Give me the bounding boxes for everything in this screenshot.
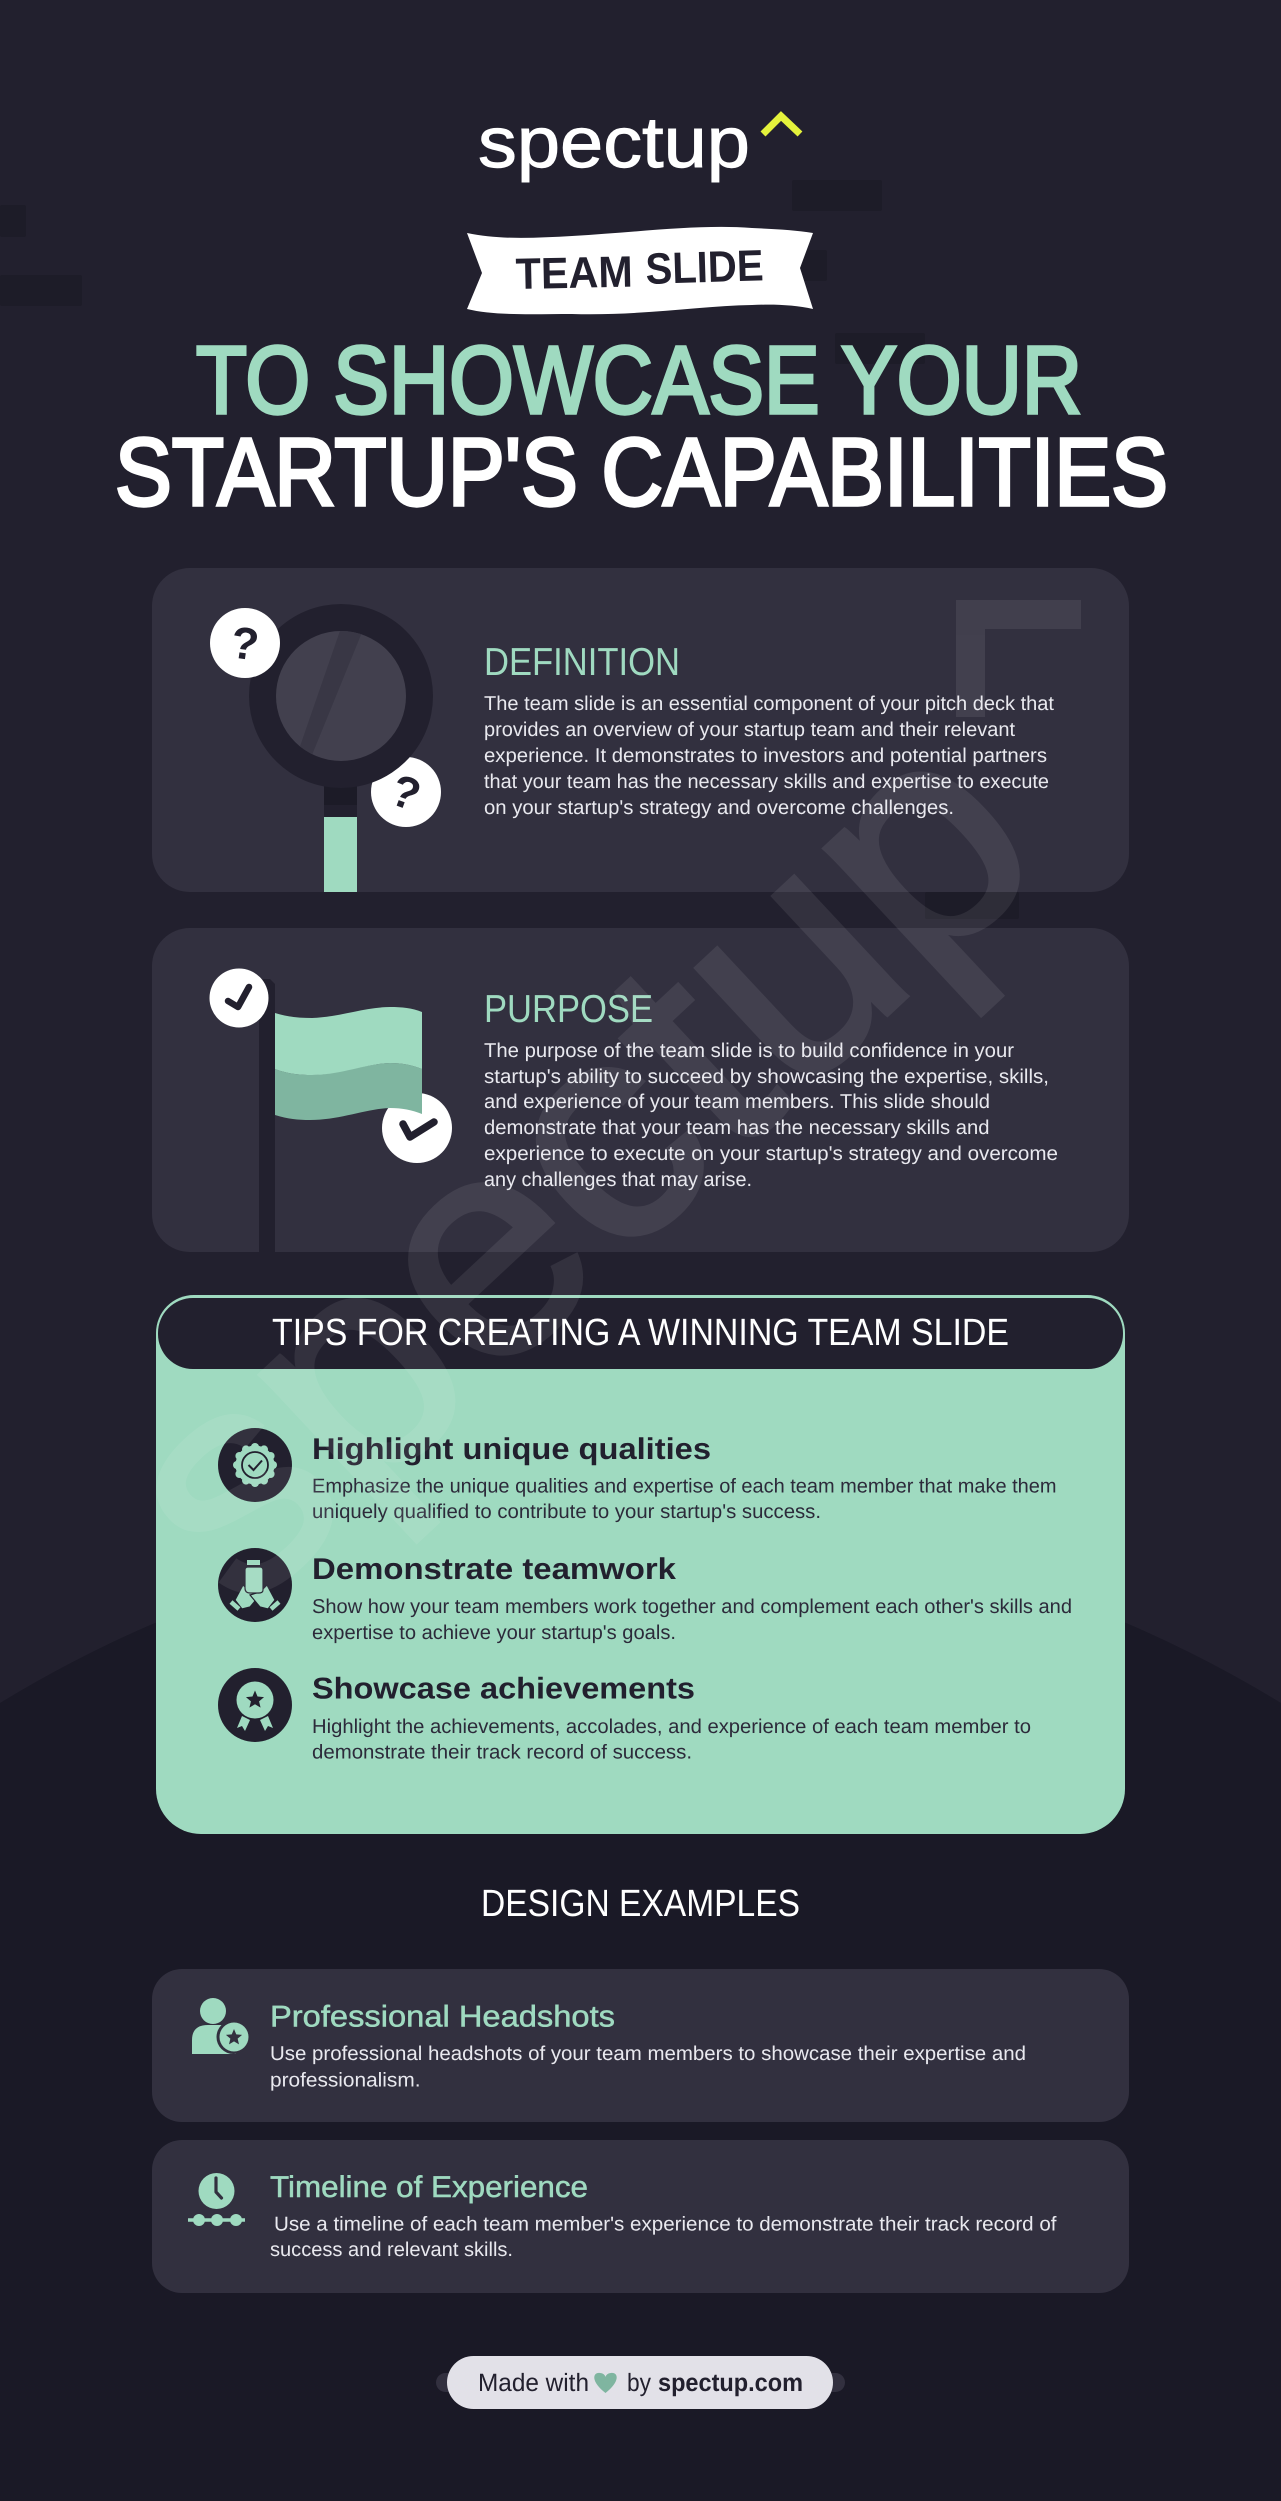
footer: made with love pill: Made with (478, 2369, 589, 2397)
title: TO SHOWCASE YOUR (196, 327, 1082, 434)
text: purpose body: any challenges that may arise. (484, 1169, 752, 1191)
tip: showcase achievements (218, 1668, 1031, 1764)
icon: team hands (218, 1548, 292, 1622)
text: definition body: that your team has the necessary skills and expertise to execute (484, 771, 1049, 793)
tip: showcase achievements: demonstrate their track record of success. (312, 1742, 692, 1764)
text: purpose body (484, 1040, 1058, 1191)
panel: definition (152, 568, 1129, 892)
panel: tips (156, 1295, 1125, 1834)
heading: definition: DEFINITION (484, 641, 680, 684)
footer: made with love pill (436, 2356, 845, 2409)
icon: clock timeline (188, 2173, 245, 2226)
panel: professional headshots: Use professional headshots of your team members to showcase their expertise and (270, 2043, 1026, 2065)
tip: showcase achievements: Highlight the achievements, accolades, and experience of each team member to (312, 1716, 1031, 1738)
icon: flag (210, 968, 452, 1252)
icon: person with star (192, 1998, 250, 2054)
panel: purpose (152, 928, 1129, 1252)
icon: magnifying glass: ? (384, 764, 427, 821)
text: purpose body: The purpose of the team slide is to build confidence in your (484, 1040, 1014, 1062)
icon: medal (218, 1668, 292, 1742)
text: definition body: on your startup's strategy and overcome challenges. (484, 797, 954, 819)
icon: badge check (218, 1428, 292, 1502)
tip: highlight unique qualities: Emphasize the unique qualities and expertise of each team member that make them (312, 1476, 1056, 1498)
text: definition body: provides an overview of your startup team and their relevant (484, 719, 1015, 741)
footer: made with love pill: by (627, 2369, 651, 2397)
panel: professional headshots: Professional Headshots (270, 2000, 615, 2034)
icon: heart (594, 2373, 617, 2393)
tip: showcase achievements: Showcase achievements (312, 1672, 695, 1706)
title (115, 327, 1168, 526)
text: purpose body: startup's ability to succeed by showcasing the expertise, skills, (484, 1066, 1049, 1088)
watermark: spectup: spectup (50, 657, 1096, 1666)
text: purpose body: and experience of your team members. This slide should (484, 1091, 990, 1113)
tip: highlight unique qualities: uniquely qualified to contribute to your startup's success. (312, 1501, 821, 1523)
panel: timeline of experience (152, 2140, 1129, 2293)
panel: timeline of experience: Timeline of Experience (270, 2171, 588, 2204)
tip: demonstrate teamwork: expertise to achieve your startup's goals. (312, 1622, 676, 1644)
icon: magnifying glass (210, 604, 441, 892)
banner: team slide: TEAM (515, 248, 633, 299)
tips header bar (158, 1298, 1123, 1369)
heading: purpose: PURPOSE (484, 988, 653, 1031)
text: definition body (484, 693, 1054, 819)
logo: spectup: spectup (478, 103, 750, 183)
tip: demonstrate teamwork: Show how your team members work together and complement each other's skills and (312, 1596, 1072, 1618)
tip: demonstrate teamwork: Demonstrate teamwork (312, 1553, 676, 1586)
icon: magnifying glass: ? (228, 616, 262, 671)
banner: team slide (467, 227, 813, 314)
tip: highlight unique qualities (218, 1428, 1056, 1523)
tips header bar: TIPS FOR CREATING A WINNING TEAM SLIDE (272, 1312, 1009, 1354)
panel: timeline of experience: Use a timeline of each team member's experience to demonstrate their track record of (274, 2214, 1057, 2236)
tip: demonstrate teamwork (218, 1548, 1072, 1644)
text: definition body: experience. It demonstrates to investors and potential partners (484, 745, 1047, 767)
tip: highlight unique qualities: Highlight unique qualities (312, 1433, 711, 1466)
title: STARTUP'S CAPABILITIES (115, 419, 1168, 526)
panel: professional headshots (152, 1969, 1129, 2122)
text: purpose body: demonstrate that your team has the necessary skills and (484, 1117, 990, 1139)
text: definition body: The team slide is an essential component of your pitch deck that (484, 693, 1054, 715)
text: purpose body: experience to execute on your startup's strategy and overcome (484, 1143, 1058, 1165)
heading: design examples: DESIGN EXAMPLES (481, 1883, 800, 1925)
footer: made with love pill: spectup.com (658, 2369, 803, 2397)
banner: team slide: SLIDE (645, 241, 764, 294)
panel: timeline of experience: success and relevant skills. (270, 2239, 513, 2261)
panel: professional headshots: professionalism. (270, 2070, 420, 2092)
